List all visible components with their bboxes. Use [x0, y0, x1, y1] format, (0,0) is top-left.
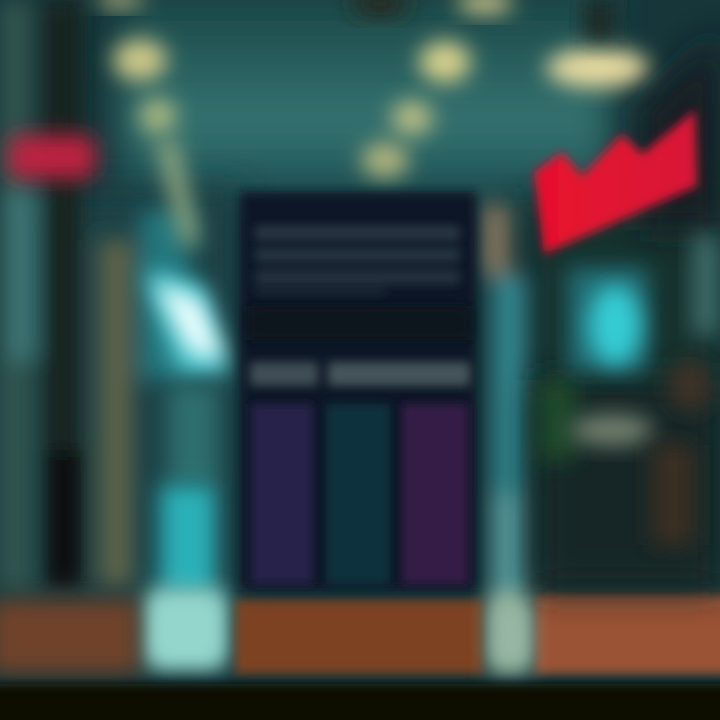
top right dark corner	[640, 30, 720, 230]
column: magenta	[402, 404, 468, 584]
re-applied light on counter	[150, 598, 222, 666]
column: teal	[326, 404, 390, 584]
central poster	[240, 192, 476, 590]
cyan glowing window	[568, 268, 648, 372]
left dark columns	[0, 0, 190, 590]
wooden counter	[0, 594, 720, 674]
blurred subheading text	[250, 362, 470, 386]
blurred heading text	[255, 226, 460, 295]
cyan light streaks	[145, 270, 230, 664]
right column beside poster	[482, 205, 530, 670]
poster board	[240, 192, 476, 590]
red band on left column	[8, 135, 96, 179]
blurred divider row	[248, 306, 470, 340]
column: purple	[251, 404, 313, 584]
right interior background	[535, 235, 720, 590]
dark floor strip	[0, 684, 720, 720]
ceiling lights	[96, 0, 650, 245]
red banner	[534, 110, 697, 254]
